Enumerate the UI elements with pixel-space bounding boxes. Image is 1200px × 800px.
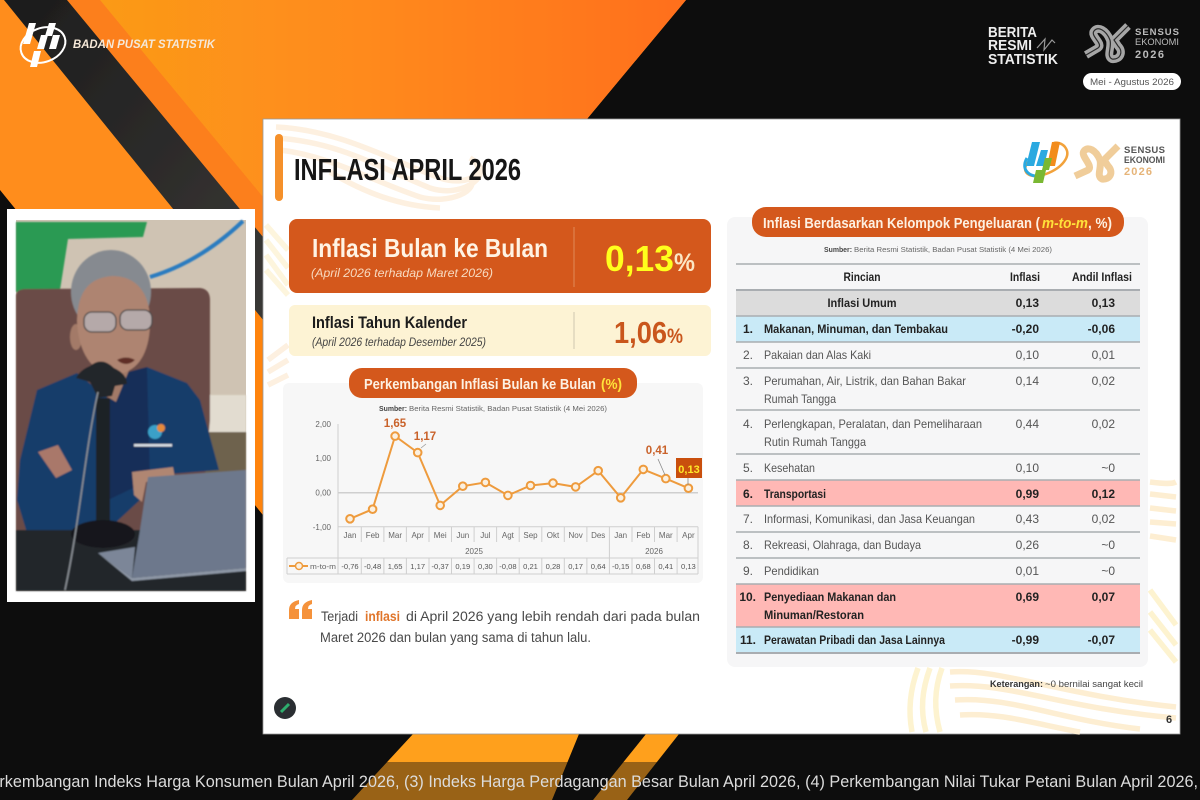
month labels: Okt (547, 531, 560, 540)
logo: Sensus Ekonomi colour (1075, 145, 1165, 179)
page number: 6 (1166, 714, 1172, 726)
row 7: Informasi, Komunikasi, dan Jasa Keuangan (764, 512, 975, 526)
logo: Sensus Ekonomi 2026 header: 2026 (1135, 49, 1164, 61)
row: Inflasi Umum: 0,13 (1016, 296, 1039, 310)
data row: 0,21 (523, 562, 538, 571)
month labels: Jun (456, 531, 469, 540)
row 3: 0,02 (1092, 374, 1115, 388)
row 10: 10. (739, 590, 756, 604)
logo: Sensus Ekonomi 2026 header: EKONOMI (1135, 37, 1179, 48)
commentary text (320, 609, 700, 645)
row 8: ~0 (1101, 538, 1115, 552)
row 6: 6. (743, 487, 753, 501)
data row: 0,68 (636, 562, 651, 571)
table header row: Andil Inflasi (1072, 270, 1132, 284)
chart source: Sumber: (379, 404, 407, 413)
table note (990, 679, 1143, 690)
logo: BPS colour (1025, 142, 1067, 183)
row 9: 9. (743, 564, 753, 578)
row 10: 0,69 (1016, 590, 1039, 604)
y axis labels: 2,00 (315, 420, 332, 429)
row 7 (743, 512, 1115, 526)
logo: Sensus Ekonomi 2026 header: SENSUS (1135, 27, 1179, 38)
row 2 (743, 348, 1115, 362)
logo: Badan Pusat Statistik (16, 21, 216, 69)
row 5: Kesehatan (764, 461, 815, 475)
row 10 (739, 590, 1115, 622)
panel: line chart (283, 368, 703, 583)
row 8 (743, 538, 1115, 552)
logo: Berita Resmi Statistik (988, 24, 1058, 68)
row 3 (743, 374, 1115, 406)
data row: 0,28 (546, 562, 560, 571)
table source: Berita Resmi Statistik, Badan Pusat Statistik (4 Mei 2026) (854, 247, 1052, 254)
row 9: Pendidikan (764, 564, 819, 578)
data row: -0,76 (341, 562, 359, 571)
row 7: 0,43 (1016, 512, 1039, 526)
row 5 (743, 461, 1115, 475)
data row: -0,48 (364, 562, 381, 571)
date pill (1083, 73, 1181, 90)
legend: m-to-m (310, 562, 336, 571)
row 9: 0,01 (1016, 564, 1039, 578)
slide panel (263, 119, 1180, 734)
row 4: 4. (743, 417, 753, 431)
row 9 (743, 564, 1115, 578)
row 6: 0,12 (1092, 487, 1115, 501)
date pill: Mei - Agustus 2026 (1090, 77, 1174, 87)
logo: Sensus Ekonomi colour: 2026 (1124, 166, 1152, 178)
row 7: 0,02 (1092, 512, 1115, 526)
row 8: Rekreasi, Olahraga, dan Budaya (764, 538, 921, 552)
row 2: 2. (743, 348, 753, 362)
row 3: 3. (743, 374, 753, 388)
card: monthly inflation: Inflasi Bulan ke Bulan (312, 233, 548, 263)
row 1: Makanan, Minuman, dan Tembakau (764, 322, 948, 336)
row: Inflasi Umum (828, 296, 1115, 310)
month labels: Feb (636, 531, 651, 540)
chart heading: (%) (601, 376, 622, 393)
table heading (752, 207, 1124, 237)
row 11: Perawatan Pribadi dan Jasa Lainnya (764, 633, 945, 647)
y axis labels: 0,00 (315, 488, 332, 498)
data row: -0,37 (432, 562, 449, 571)
row 6 (743, 487, 1115, 501)
row 9: ~0 (1101, 564, 1115, 578)
card: calendar-year inflation (289, 305, 711, 356)
month labels: Nov (568, 531, 583, 540)
commentary text: inflasi (365, 609, 400, 624)
data row: -0,15 (612, 562, 629, 571)
month labels: Des (591, 531, 605, 540)
table header row (844, 270, 1132, 284)
data labels: 1,17 (414, 431, 436, 443)
legend (289, 562, 336, 571)
month labels: Jan (344, 531, 356, 540)
table heading: m-to-m (1042, 216, 1088, 232)
row 4: 0,02 (1092, 417, 1115, 431)
logo: Berita Resmi Statistik: RESMI (988, 37, 1032, 54)
data row: -0,08 (499, 562, 517, 571)
card: calendar-year inflation: % (667, 325, 683, 348)
month labels: Agt (502, 531, 515, 540)
panel: expenditure table (727, 207, 1148, 667)
data row: 0,13 (681, 562, 696, 571)
logo: Berita Resmi Statistik: STATISTIK (988, 51, 1058, 68)
table header row: Rincian (844, 270, 880, 284)
row 1: -0,06 (1088, 322, 1115, 336)
title accent bar (275, 134, 283, 201)
row 6: 0,99 (1016, 487, 1039, 501)
data row: 1,65 (388, 562, 402, 571)
month labels: Feb (366, 531, 380, 540)
year labels: 2025 (465, 547, 483, 556)
row 2: 0,01 (1092, 348, 1115, 362)
row 4: Rutin Rumah Tangga (764, 435, 866, 449)
card: monthly inflation: % (674, 249, 695, 277)
title: INFLASI APRIL 2026 (294, 152, 521, 187)
table source: Sumber: (824, 247, 852, 254)
card: monthly inflation: (April 2026 terhadap Maret 2026) (311, 266, 493, 280)
logo: Sensus Ekonomi 2026 header (1086, 26, 1179, 61)
month labels: Apr (682, 531, 695, 540)
row 4: Perlengkapan, Peralatan, dan Pemeliharaan (764, 417, 982, 431)
card: calendar-year inflation: (April 2026 terhadap Desember 2025) (312, 337, 486, 349)
logo: Sensus Ekonomi colour: EKONOMI (1124, 155, 1165, 166)
month labels: Sep (523, 531, 538, 540)
row 1: -0,20 (1012, 322, 1039, 336)
row: Inflasi Umum: 0,13 (1092, 296, 1115, 310)
chart heading (349, 368, 637, 398)
commentary text: Maret 2026 dan bulan yang sama di tahun lalu. (320, 630, 591, 645)
month labels (344, 531, 695, 540)
card: calendar-year inflation: Inflasi Tahun Kalender (312, 313, 467, 332)
row 10: 0,07 (1092, 590, 1115, 604)
month labels: Jul (480, 531, 491, 540)
month labels: Mei (434, 531, 447, 540)
data row: 0,30 (478, 562, 493, 571)
data row (341, 562, 696, 571)
table header row: Inflasi (1010, 270, 1040, 284)
row 8: 0,26 (1016, 538, 1039, 552)
data row: 1,17 (410, 562, 425, 571)
table note: Keterangan: (990, 679, 1043, 690)
row 1 (743, 322, 1115, 336)
month labels: Apr (411, 531, 424, 540)
data labels: 1,65 (384, 418, 407, 430)
row 4: 0,44 (1016, 417, 1039, 431)
row 2: Pakaian dan Alas Kaki (764, 348, 871, 362)
icon: pen button (274, 697, 296, 719)
line series: m-to-m (346, 432, 692, 523)
row 2: 0,10 (1016, 348, 1039, 362)
row 3: Perumahan, Air, Listrik, dan Bahan Bakar (764, 374, 966, 388)
chart grid and category table (287, 424, 698, 574)
card: monthly inflation: 0,13 (605, 238, 674, 279)
row 4 (743, 417, 1115, 449)
presenter video frame (7, 209, 255, 602)
row 3: 0,14 (1016, 374, 1039, 388)
row 7: 7. (743, 512, 753, 526)
data labels: 0,41 (646, 445, 669, 457)
logo: Sensus Ekonomi colour: SENSUS (1124, 145, 1165, 156)
row backgrounds (736, 290, 1140, 653)
chart heading: Perkembangan Inflasi Bulan ke Bulan (364, 376, 596, 393)
month labels: Jan (614, 531, 627, 540)
row 1: 1. (743, 322, 753, 336)
row 11 (740, 633, 1115, 647)
row 8: 8. (743, 538, 753, 552)
chart source: Berita Resmi Statistik, Badan Pusat Statistik (4 Mei 2026) (409, 404, 608, 413)
card: calendar-year inflation: 1,06 (614, 315, 667, 350)
data row: 0,17 (568, 562, 583, 571)
year labels (465, 547, 663, 556)
data row: 0,64 (591, 562, 606, 571)
y axis labels (313, 420, 332, 532)
month labels: Mar (659, 531, 673, 540)
icon: quotation mark (289, 600, 312, 619)
row 5: ~0 (1101, 461, 1115, 475)
month labels: Mar (388, 531, 402, 540)
commentary text: di April 2026 yang lebih rendah dari pada bulan (406, 609, 700, 624)
callout: latest value: 0,13 (678, 464, 700, 476)
callout: latest value (676, 458, 702, 478)
data row: 0,19 (455, 562, 470, 571)
row 11: 11. (740, 633, 756, 647)
y axis labels: 1,00 (315, 454, 332, 463)
commentary text: Terjadi (321, 609, 358, 624)
logo: Berita Resmi Statistik: BERITA (988, 24, 1037, 41)
y axis labels: -1,00 (313, 523, 332, 532)
row 10: Penyediaan Makanan dan (764, 590, 896, 604)
row 10: Minuman/Restoran (764, 608, 864, 622)
card: monthly inflation (289, 219, 711, 293)
row 6: Transportasi (764, 487, 826, 501)
row 3: Rumah Tangga (764, 392, 836, 406)
row 11: -0,99 (1012, 633, 1039, 647)
row 5: 0,10 (1016, 461, 1039, 475)
year labels: 2026 (645, 547, 663, 556)
row 11: -0,07 (1088, 633, 1115, 647)
logo: Badan Pusat Statistik: BADAN PUSAT STATISTIK (73, 39, 216, 51)
row: Inflasi Umum: Inflasi Umum (828, 296, 896, 310)
table note: ~0 bernilai sangat kecil (1045, 679, 1143, 690)
table heading: , %) (1088, 216, 1112, 232)
row rules (736, 264, 1140, 653)
row 5: 5. (743, 461, 753, 475)
data labels (384, 418, 688, 485)
table heading: Inflasi Berdasarkan Kelompok Pengeluaran ( (763, 216, 1040, 232)
data row: 0,41 (658, 562, 673, 571)
